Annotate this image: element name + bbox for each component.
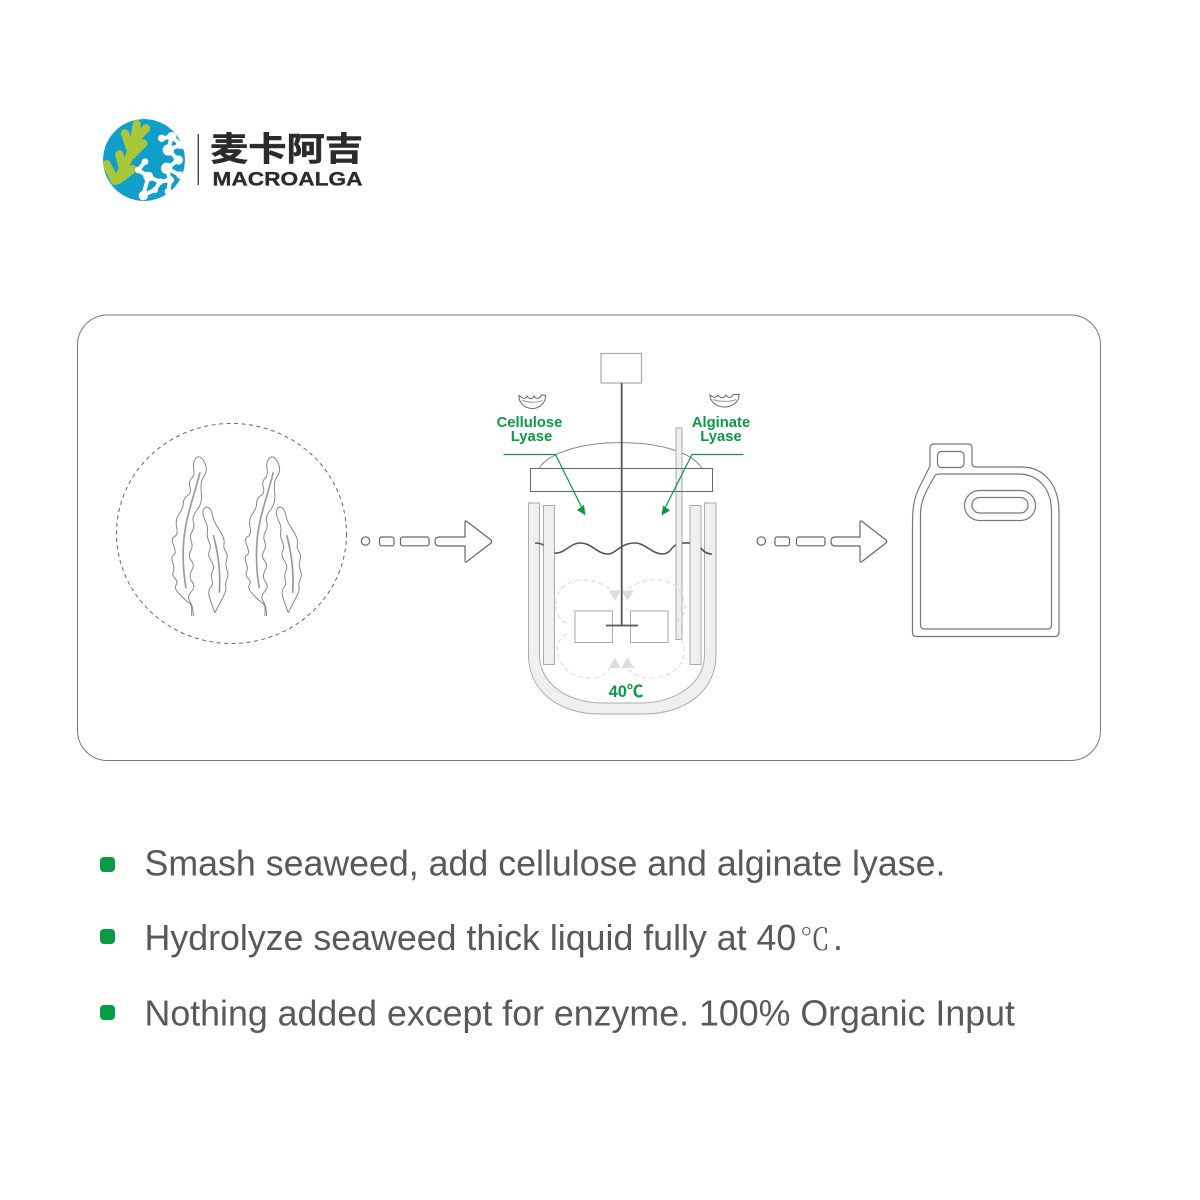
- text: step 3: Nothing added except for enzyme. 100% Organic Input: [144, 994, 1015, 1034]
- icon: seaweed leaves: [172, 457, 301, 616]
- logo Chinese name: 麦卡阿吉: [210, 131, 363, 168]
- reactor lid: [530, 468, 712, 492]
- cellulose lyase label: Lyase: [511, 429, 552, 445]
- arrow: cellulose lyase: [504, 454, 586, 516]
- motor box: [601, 354, 642, 383]
- arrow: reactor to jug: [757, 521, 887, 562]
- jug cap: [938, 452, 964, 468]
- inner baffles: [544, 428, 701, 664]
- liquid surface: [535, 543, 712, 554]
- lid dome: [539, 443, 702, 468]
- logo English name: MACROALGA: [212, 168, 362, 190]
- dashed circle: [116, 424, 346, 644]
- icon: seaweed and molecule badge: [103, 119, 185, 201]
- jug handle: [964, 490, 1036, 520]
- text: step 2: .: [833, 918, 843, 958]
- cellulose lyase label: Cellulose: [497, 415, 562, 431]
- stirring shaft: [606, 383, 638, 626]
- text: step 2: Hydrolyze seaweed thick liquid fully at 40: [144, 918, 796, 958]
- text: step 1: Smash seaweed, add cellulose and alginate lyase.: [144, 844, 945, 884]
- jacket wall: [528, 503, 716, 714]
- panel: process diagram: [78, 315, 1100, 760]
- icon: cellulose lyase enzyme: [519, 395, 546, 408]
- stirring flow loops: [556, 580, 685, 678]
- impeller boxes: [575, 611, 668, 642]
- logo divider: [198, 134, 199, 185]
- icon: alginate lyase enzyme: [710, 394, 739, 407]
- logo: [103, 119, 363, 201]
- seaweed circle: [116, 424, 346, 644]
- bullet 2: [100, 929, 115, 944]
- arrow: alginate lyase: [662, 454, 744, 516]
- temperature label: 40℃: [609, 683, 644, 701]
- text: step 2: ℃: [800, 915, 830, 959]
- jug outer outline: [912, 444, 1059, 636]
- bullet 3: [100, 1005, 115, 1020]
- alginate lyase label: Alginate: [692, 415, 750, 431]
- bullet 1: [100, 857, 115, 872]
- arrow: seaweed to reactor: [361, 521, 492, 562]
- reactor vessel: [497, 354, 750, 714]
- flow arrowheads: [608, 590, 634, 668]
- icon: product jug: [912, 444, 1059, 636]
- alginate lyase label: Lyase: [700, 429, 742, 445]
- jug inner outline: [920, 474, 1052, 629]
- bullet list: [100, 844, 1015, 1034]
